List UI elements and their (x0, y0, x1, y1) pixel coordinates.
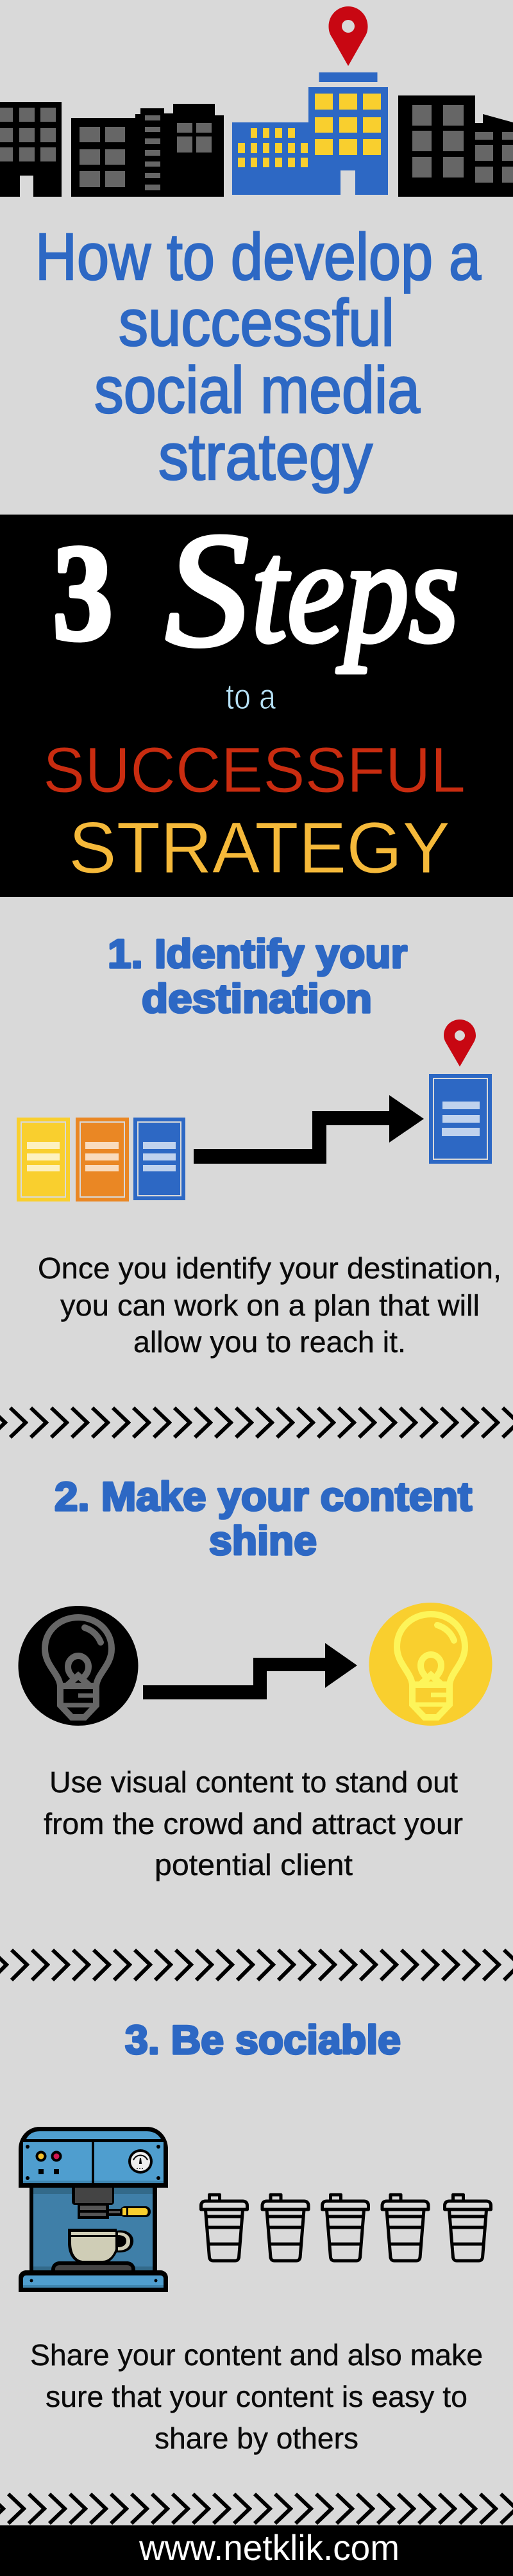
icon: cup 3 (322, 2195, 368, 2261)
icon: map pin (328, 6, 368, 66)
heading: step 2 (55, 1474, 472, 1564)
diagram: dark bulb to bright bulb (18, 1603, 492, 1726)
text: step 3 body: share by others (155, 2422, 358, 2455)
machine top housing (19, 2127, 168, 2188)
building: black right (398, 95, 513, 197)
icon: destination document (429, 1074, 492, 1164)
machine base (19, 2270, 168, 2292)
text: step 1 body: Once you identify your destination, (38, 1251, 501, 1285)
icon: small map pin (444, 1020, 476, 1066)
title: social media (94, 353, 421, 427)
icon: cup 2 (262, 2195, 308, 2261)
icon: coffee machine (19, 2127, 168, 2292)
heading: step 2: 2. Make your content (55, 1474, 472, 1519)
text: step 2 body: from the crowd and attract your (44, 1807, 463, 1840)
heading: step 1 (108, 932, 407, 1021)
panel: 3 steps banner (0, 500, 513, 897)
building: black left (0, 102, 62, 197)
text: step 2 body: Use visual content to stand out (49, 1765, 458, 1799)
banner word Steps: teps (251, 509, 459, 673)
arrow: stepped (143, 1643, 357, 1699)
text: step 1 body (38, 1251, 501, 1358)
icon: orange document (76, 1118, 129, 1201)
drip tray (51, 2261, 135, 2275)
icon: cup 4 (382, 2195, 428, 2261)
building: blue destination (232, 72, 388, 195)
title: successful (119, 286, 394, 359)
text: step 3 body: Share your content and also make (30, 2338, 483, 2372)
icon: cup 1 (201, 2195, 248, 2261)
city skyline (0, 6, 513, 197)
machine body (29, 2182, 157, 2275)
to a: to a (226, 676, 276, 716)
text: step 1 body: allow you to reach it. (133, 1325, 406, 1358)
footer (0, 2525, 513, 2576)
icon: blue document (133, 1118, 185, 1200)
heading: step 1: destination (142, 977, 372, 1021)
icons: row of takeaway cups (201, 2195, 491, 2261)
arrow: stepped (194, 1095, 424, 1164)
diagram: documents to destination (17, 1020, 492, 1201)
banner number 3: 3 (53, 516, 113, 669)
icon: unlit bulb (18, 1606, 139, 1726)
title (35, 220, 482, 493)
icon: cup 5 (445, 2195, 491, 2261)
title: strategy (158, 420, 373, 493)
heading: step 3: 3. Be sociable (125, 2018, 401, 2063)
building: black middle (71, 104, 224, 197)
SUCCESSFUL: SUCCESSFUL (43, 734, 466, 806)
heading: step 1: 1. Identify your (108, 932, 407, 977)
text: step 1 body: you can work on a plan that will (60, 1289, 480, 1322)
heading: step 2: shine (209, 1519, 317, 1564)
icon: lit bulb (369, 1603, 492, 1726)
text: step 3 body: sure that your content is easy to (46, 2380, 467, 2413)
footer website link: www.netklik.com (139, 2527, 399, 2568)
text: step 3 body (30, 2338, 483, 2455)
coffee cup (68, 2229, 133, 2263)
STRATEGY: STRATEGY (69, 807, 450, 888)
text: step 2 body (44, 1765, 463, 1881)
banner word Steps: S (165, 500, 249, 681)
text: step 2 body: potential client (155, 1848, 353, 1881)
icon: yellow document (17, 1118, 70, 1201)
group head and handle (72, 2188, 114, 2219)
